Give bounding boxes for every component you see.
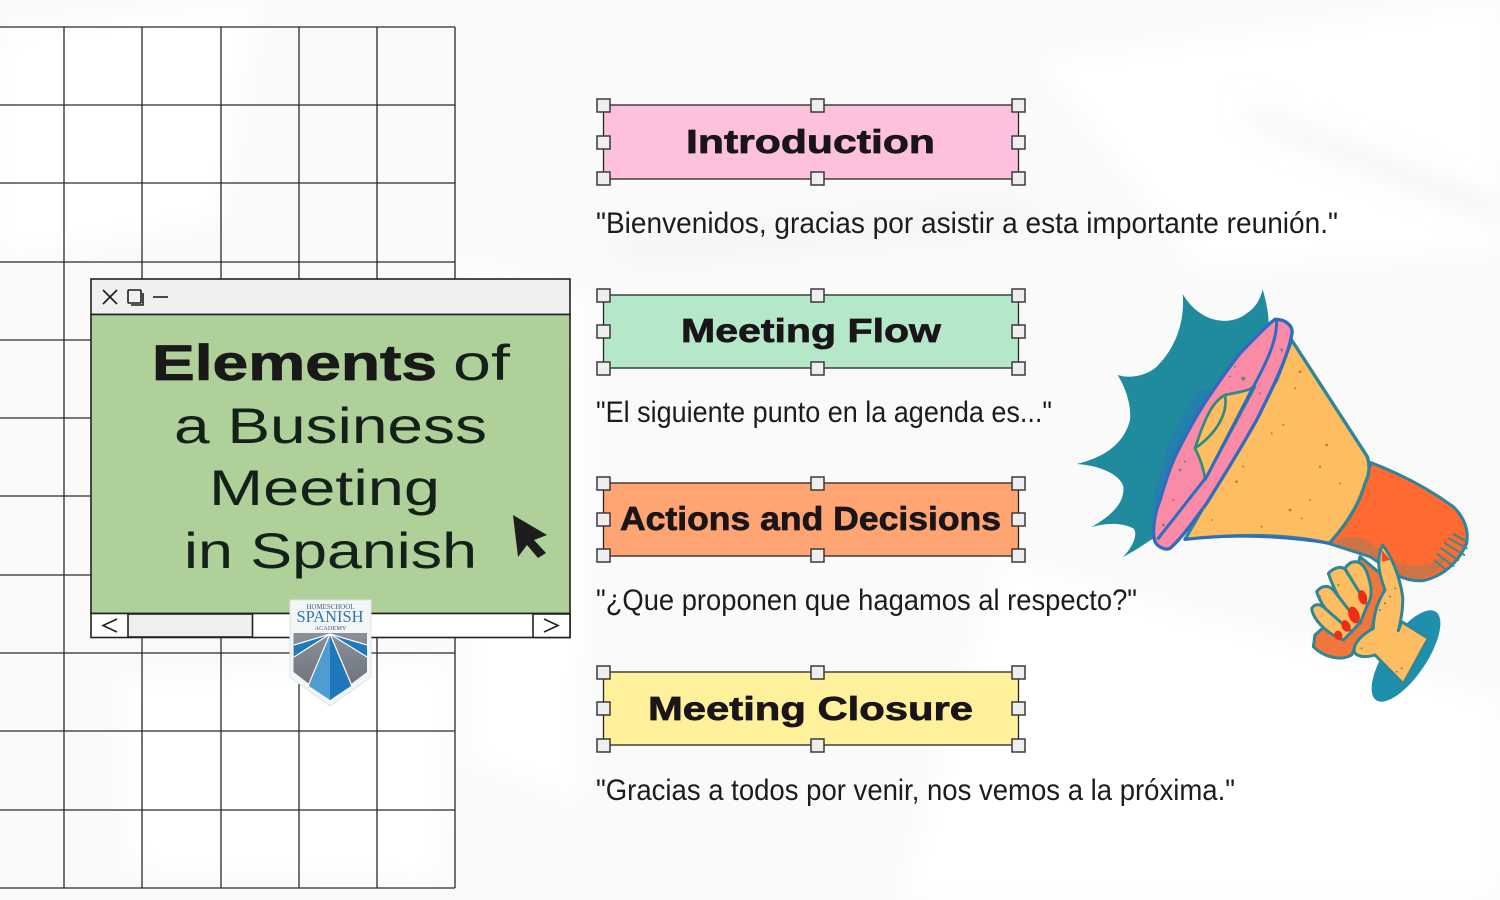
megaphone rim — [1154, 319, 1292, 549]
label box — [604, 672, 1018, 745]
fingers — [1312, 562, 1371, 640]
selection handles — [597, 477, 1025, 562]
title heading — [152, 335, 510, 579]
thumb and wrist — [1354, 545, 1428, 684]
panel: Introduction — [596, 99, 1338, 240]
label box — [604, 105, 1018, 179]
logo: Homeschool Spanish Academy shield: ACADEMY — [314, 626, 347, 632]
window title bar — [91, 279, 570, 314]
handle stippled shadow — [1333, 537, 1448, 579]
example phrase: "Gracias a todos por venir, nos vemos a la próxima." — [596, 774, 1235, 807]
illustration: megaphone held in hand — [1077, 289, 1467, 712]
megaphone handle — [1328, 463, 1467, 581]
panel: Meeting Flow — [596, 289, 1052, 429]
handle shaft behind fingers — [1313, 557, 1387, 658]
background grid — [0, 27, 455, 888]
megaphone body — [1077, 289, 1467, 581]
example phrase: "El siguiente punto en la agenda es..." — [596, 396, 1052, 429]
title heading: a Business — [174, 398, 487, 454]
logo: Homeschool Spanish Academy shield — [290, 600, 371, 706]
example phrase: "¿Que proponen que hagamos al respecto?" — [596, 584, 1137, 617]
window green content area — [91, 314, 570, 614]
panel: Meeting Closure — [596, 666, 1235, 807]
handle end hatching — [1435, 534, 1467, 570]
panel: title window — [91, 279, 570, 638]
example phrase: "Bienvenidos, gracias por asistir a esta importante reunión." — [596, 207, 1338, 240]
megaphone mouth — [1195, 387, 1255, 480]
speckles — [1211, 370, 1341, 528]
title heading: of — [453, 335, 510, 391]
heading: Meeting Flow — [681, 312, 941, 349]
sound burst — [1077, 289, 1269, 557]
skin speckles — [1319, 584, 1403, 673]
selection handles — [597, 99, 1025, 185]
wrist cuff — [1359, 600, 1453, 712]
icon: mouse cursor — [513, 515, 547, 558]
window control icons — [103, 290, 168, 305]
panel: Actions and Decisions — [596, 477, 1137, 617]
title heading: Elements — [152, 335, 437, 391]
label box — [604, 483, 1018, 556]
heading: Actions and Decisions — [620, 500, 1001, 537]
logo: Homeschool Spanish Academy shield: SPANISH — [296, 607, 364, 626]
red nails — [1333, 589, 1369, 641]
hand holding the megaphone — [1312, 545, 1453, 712]
title heading: in Spanish — [184, 523, 477, 579]
heading: Introduction — [686, 123, 935, 160]
logo: Homeschool Spanish Academy shield: HOMESCHOOL — [306, 603, 354, 611]
selection handles — [597, 666, 1025, 752]
selection handles — [597, 289, 1025, 375]
label box — [604, 295, 1018, 368]
megaphone cone — [1185, 340, 1369, 543]
title heading: Meeting — [209, 460, 440, 516]
window scrollbar — [91, 614, 570, 638]
thumbnail — [1382, 550, 1390, 562]
heading: Meeting Closure — [648, 690, 973, 727]
